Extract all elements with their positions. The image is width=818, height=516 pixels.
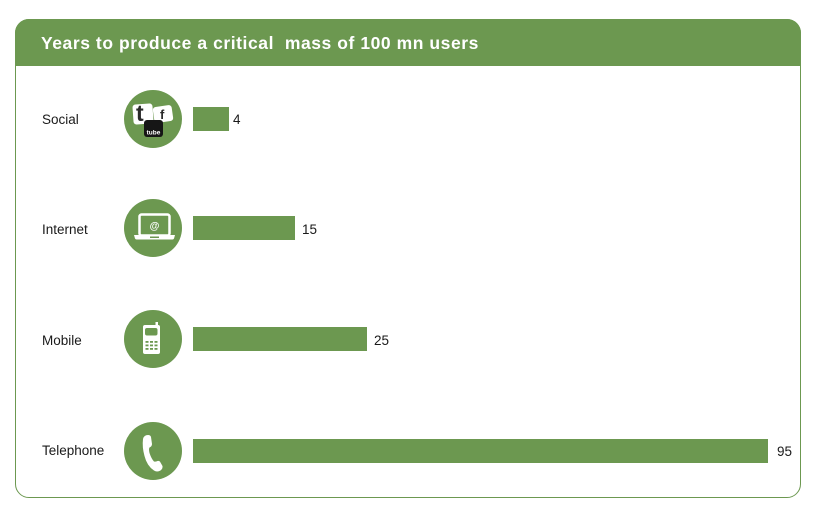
bar: Telephone [193,439,768,463]
icon: laptop: @ [150,221,160,232]
icon: social media: t [136,100,144,126]
icon: laptop [124,199,182,257]
icon: social media: f [160,107,165,122]
value: Internet: 15 [302,222,317,237]
icon: telephone handset [124,422,182,480]
bar: Social [193,107,229,131]
title: Years to produce a critical mass of 100 mn users [41,33,479,53]
icon: mobile phone [124,310,182,368]
icon: social media: tube [147,130,161,136]
bar: Internet [193,216,295,240]
panel heading band [15,19,801,66]
label: Internet: Internet [42,222,88,237]
value: Telephone: 95 [777,444,792,459]
bar: Mobile [193,327,367,351]
label: Mobile: Mobile [42,333,82,348]
label: Social: Social [42,112,79,127]
value: Social: 4 [233,112,241,127]
value: Mobile: 25 [374,333,389,348]
icon: social media [124,90,182,148]
label: Telephone: Telephone [42,443,104,458]
